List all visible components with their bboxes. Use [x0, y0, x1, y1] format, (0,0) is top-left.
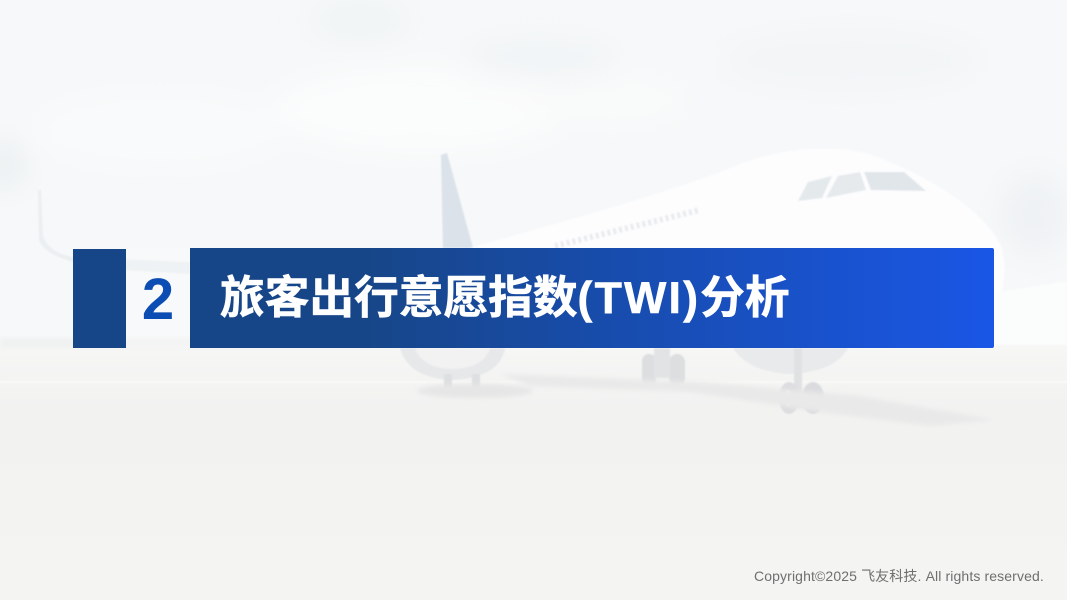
- cockpit windows: [798, 176, 832, 201]
- fuselage: [470, 149, 1005, 348]
- left wing: [38, 190, 190, 274]
- panel: section number block: [73, 249, 174, 348]
- passenger windows: [555, 210, 700, 246]
- ground: [0, 345, 1067, 600]
- footer copyright: Copyright©2025 飞友科技. All rights reserved.: [754, 568, 1044, 584]
- dark blue accent bar: [73, 249, 126, 348]
- tail fin: [441, 153, 473, 248]
- engines: [400, 348, 505, 380]
- section number: 2: [142, 267, 174, 332]
- landing gear: [642, 354, 656, 386]
- right wing behind nose: [994, 281, 1067, 345]
- panel: section title banner: [190, 248, 994, 348]
- aircraft shadow: [417, 374, 995, 426]
- number backing: [126, 249, 190, 348]
- heading: 旅客出行意愿指数(TWI)分析: [220, 274, 790, 323]
